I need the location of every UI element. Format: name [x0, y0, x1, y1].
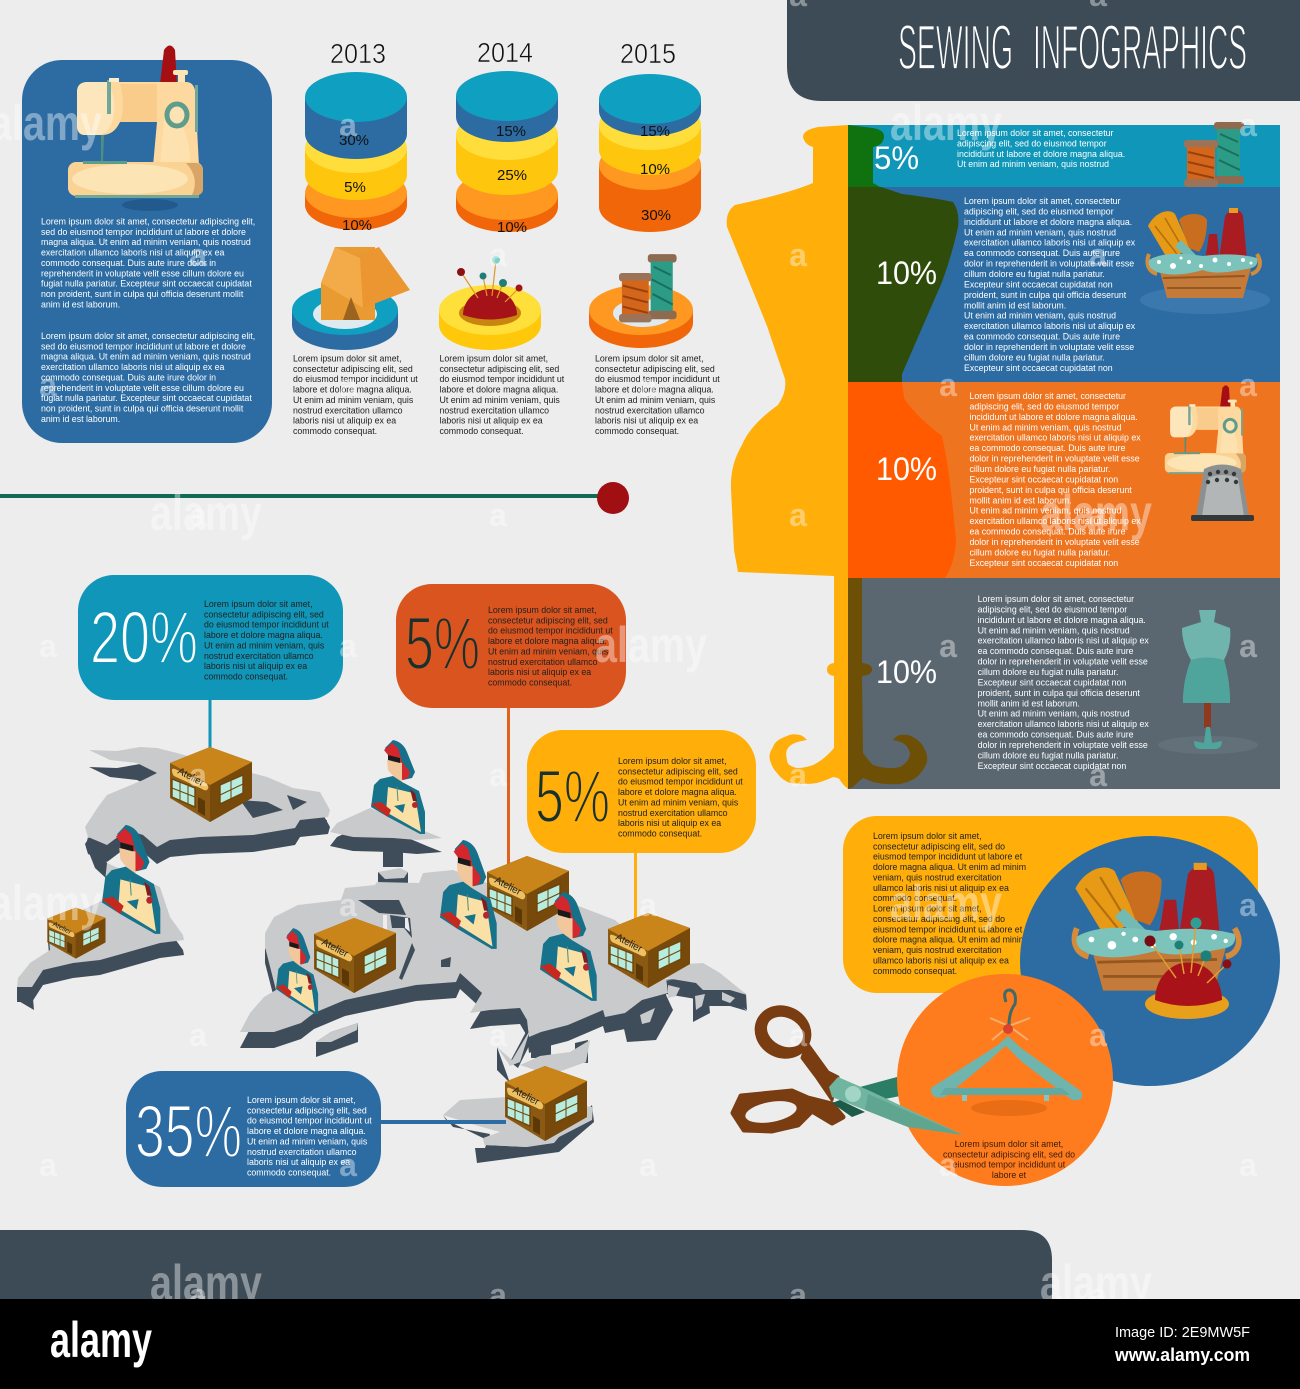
map inland gaps [383, 915, 410, 932]
panel: third 10%: ea commodo consequat. Duis aute irure [978, 646, 1134, 656]
watermark pattern: alamy [890, 875, 1002, 931]
seamstress 4 [540, 892, 597, 1001]
panel: 5%: incididunt ut labore et dolore magna aliqua. [957, 149, 1125, 159]
orange circle with hanger: eiusmod tempor incididunt ut [953, 1160, 1066, 1170]
paragraph one: reprehenderit in voluptate velit esse cillum dolore eu [41, 268, 244, 278]
text 2014: do eiusmod tempor incididunt ut [440, 374, 565, 384]
callout: 35%: consectetur adipiscing elit, sed [247, 1105, 367, 1115]
watermark pattern: a [189, 237, 207, 273]
text 2014: Ut enim ad minim veniam, quis [440, 395, 560, 405]
atelier building 3 [314, 918, 396, 993]
panel: amber notes: dolore magna aliqua. Ut enim ad minim [873, 862, 1026, 872]
paragraph one: commodo consequat. Duis aute irure dolor in [41, 258, 216, 268]
callout: 35%: nostrud exercitation ullamco [247, 1147, 357, 1157]
watermark pattern: a [339, 107, 357, 143]
map land layer [17, 747, 747, 1147]
panel: second 10%: Ut enim ad minim veniam, quis nostrud [970, 506, 1122, 516]
panel: first 10%: exercitation ullamco laboris nisi ut aliquip ex [964, 321, 1136, 331]
text 2013: commodo consequat. [293, 426, 377, 436]
text 2015: nostrud exercitation ullamco [595, 405, 705, 415]
callout: 5% amber [527, 730, 756, 853]
panel: amber notes: Lorem ipsum dolor sit amet, [873, 831, 982, 841]
panel: first 10% [848, 187, 1280, 382]
panel: first 10%: exercitation ullamco laboris nisi ut aliquip ex [964, 238, 1136, 248]
callout: 5% amber: do eiusmod tempor incididunt ut [618, 777, 743, 787]
callout: 5% orange [396, 584, 626, 708]
paragraph two: fugiat nulla pariatur. Excepteur sint occaecat cupidatat [41, 393, 252, 403]
watermark pattern: a [1089, 237, 1107, 273]
panel: first 10%: Ut enim ad minim veniam, quis nostrud [964, 227, 1116, 237]
panel: 5%: 5% [874, 140, 919, 176]
source footer: Image ID: 2E9MW5F [1115, 1324, 1250, 1341]
panel: second 10%: dolor in reprehenderit in voluptate velit esse [970, 537, 1140, 547]
callout: 5% amber: consectetur adipiscing elit, sed [618, 766, 738, 776]
watermark pattern: a [639, 1147, 657, 1183]
panel: second 10%: Lorem ipsum dolor sit amet, consectetur [970, 391, 1126, 401]
stacked cylinder 2015 [599, 74, 701, 232]
callout: 35%: laboris nisi ut aliquip ex ea [247, 1157, 350, 1167]
callout: 5% orange: laboris nisi ut aliquip ex ea [488, 667, 591, 677]
watermark pattern: a [639, 367, 657, 403]
atelier building 1: Atelier [176, 766, 206, 789]
watermark pattern: a [939, 1147, 957, 1183]
text 2013: do eiusmod tempor incididunt ut [293, 374, 418, 384]
paragraph two: magna aliqua. Ut enim ad minim veniam, quis nostrud [41, 352, 251, 362]
stacked cylinder 2014 [456, 71, 558, 236]
paragraph one: exercitation ullamco laboris nisi ut aliquip ex ea [41, 248, 224, 258]
panel: second 10%: Excepteur sint occaecat cupidatat non [970, 558, 1118, 568]
watermark pattern: a [1239, 887, 1257, 923]
panel: amber notes: eiusmod tempor incididunt ut labore et [873, 924, 1023, 934]
callout: 5% orange: Ut enim ad minim veniam, quis [488, 646, 609, 656]
text 2014: consectetur adipiscing elit, sed [440, 364, 559, 374]
seamstress 3 [440, 840, 497, 949]
panel: amber notes: eiusmod tempor incididunt ut labore et [873, 852, 1023, 862]
watermark pattern: a [939, 628, 957, 664]
ring with spools icon [589, 254, 693, 348]
watermark pattern: a [39, 1147, 57, 1183]
callout: 5% amber: 5% [535, 755, 610, 838]
text 2014: Lorem ipsum dolor sit amet, [440, 354, 548, 364]
atelier building 2 [47, 908, 106, 959]
callout: 35%: Lorem ipsum dolor sit amet, [247, 1095, 356, 1105]
panel: third 10%: adipiscing elit, sed do eiusmod tempor [978, 604, 1127, 614]
callout: 5% orange: nostrud exercitation ullamco [488, 657, 598, 667]
bottom bar [0, 1230, 1052, 1299]
map shadow layer [17, 764, 747, 1163]
callout: 5% orange: 5% [405, 602, 480, 685]
watermark pattern: a [489, 497, 507, 533]
panel: first 10%: ea commodo consequat. Duis aute irure [964, 248, 1120, 258]
stacked cylinder 2013 [305, 72, 407, 234]
panel: 5% [848, 122, 1280, 187]
panel: second 10%: exercitation ullamco laboris nisi ut aliquip ex [970, 433, 1141, 443]
callout: 5% amber: labore et dolore magna aliqua. [618, 787, 737, 797]
stacked cylinder 2013: 5% [344, 179, 366, 196]
panel: first 10%: incididunt ut labore et dolore magna aliqua. [964, 217, 1132, 227]
text 2015: Lorem ipsum dolor sit amet, [595, 354, 704, 364]
panel: second 10%: 10% [876, 451, 937, 487]
callout: 5% orange: do eiusmod tempor incididunt ut [488, 626, 613, 636]
world map [17, 747, 747, 1163]
callout: 35%: 35% [135, 1090, 242, 1173]
watermark pattern: a [39, 367, 57, 403]
paragraph one: sed do eiusmod tempor incididunt ut labore et dolore [41, 227, 246, 237]
seamstress 1 [371, 740, 425, 834]
watermark pattern: a [939, 367, 957, 403]
panel stack with dress form [727, 122, 1280, 789]
panel: first 10%: dolor in reprehenderit in voluptate velit esse [964, 342, 1134, 352]
text 2015: laboris nisi ut aliquip ex ea [595, 416, 698, 426]
atelier building 4 [487, 856, 569, 931]
panel: third 10%: 10% [876, 654, 937, 690]
panel: second 10% [848, 382, 1280, 578]
text 2013: labore et dolore magna aliqua. [293, 385, 412, 395]
paragraph two: reprehenderit in voluptate velit esse cillum dolore eu [41, 383, 244, 393]
callout: 5% amber: commodo consequat. [618, 829, 702, 839]
callout: 5% orange: labore et dolore magna aliqua. [488, 636, 607, 646]
callout: 35%: labore et dolore magna aliqua. [247, 1126, 366, 1136]
text 2013: laboris nisi ut aliquip ex ea [293, 416, 396, 426]
watermark pattern: alamy [1040, 1255, 1152, 1311]
title bar [787, 0, 1300, 101]
callout: 20%: 20% [90, 596, 198, 679]
watermark pattern: a [1239, 107, 1257, 143]
watermark pattern: a [789, 1277, 807, 1313]
watermark pattern: a [189, 1277, 207, 1313]
panel: 5%: adipiscing elit, sed do eiusmod tempor [957, 138, 1107, 148]
panel: amber notes: veniam, quis nostrud exercitation [873, 872, 1002, 882]
atelier building 6 [505, 1066, 587, 1141]
source footer: alamy [50, 1312, 152, 1368]
callout: 5% orange: Lorem ipsum dolor sit amet, [488, 605, 597, 615]
panel: third 10%: Ut enim ad minim veniam, quis nostrud [978, 709, 1130, 719]
blue circle with basket [1020, 836, 1280, 1086]
panel: first 10%: adipiscing elit, sed do eiusmod tempor [964, 206, 1114, 216]
panel: 5%: Lorem ipsum dolor sit amet, consectetur [957, 128, 1113, 138]
panel: first 10%: 10% [876, 255, 937, 291]
callout: 20%: do eiusmod tempor incididunt ut [204, 620, 329, 630]
callout: 5% orange: consectetur adipiscing elit, sed [488, 615, 608, 625]
panel: third 10%: ea commodo consequat. Duis aute irure [978, 730, 1134, 740]
panel: first 10%: Ut enim ad minim veniam, quis nostrud [964, 311, 1116, 321]
panel: third 10% [848, 578, 1280, 789]
text 2014: labore et dolore magna aliqua. [440, 385, 558, 395]
panel: third 10%: exercitation ullamco laboris nisi ut aliquip ex [978, 719, 1149, 729]
panel: third 10%: proident, sunt in culpa qui officia deserunt [978, 688, 1140, 698]
watermark pattern: a [189, 757, 207, 793]
text 2015: do eiusmod tempor incididunt ut [595, 374, 720, 384]
panel: amber notes: consectetur adipiscing elit, sed do [873, 841, 1005, 851]
callout: 35%: Ut enim ad minim veniam, quis [247, 1136, 368, 1146]
watermark pattern: a [339, 887, 357, 923]
panel: amber notes: veniam, quis nostrud exercitation [873, 945, 1002, 955]
watermark pattern: alamy [150, 1255, 262, 1311]
watermark pattern: a [1089, 757, 1107, 793]
callout: 5% amber: Lorem ipsum dolor sit amet, [618, 756, 727, 766]
atelier building 2: Atelier [51, 921, 73, 936]
year 2013 column: 2013 [330, 38, 386, 69]
stacked cylinder 2013: 30% [339, 132, 369, 149]
panel: first 10%: Excepteur sint occaecat cupidatat non [964, 363, 1113, 373]
watermark pattern: a [1089, 1277, 1107, 1313]
watermark pattern: a [1089, 497, 1107, 533]
panel: first 10%: Lorem ipsum dolor sit amet, consectetur [964, 196, 1120, 206]
paragraph two: non proident, sunt in culpa qui officia deserunt mollit [41, 404, 244, 414]
pin divider [0, 482, 629, 514]
text 2013: consectetur adipiscing elit, sed [293, 364, 413, 374]
panel: amber notes: ullamco laboris nisi ut aliquip ex ea [873, 955, 1009, 965]
panel: sewing machine description [22, 46, 272, 443]
callout: 20%: labore et dolore magna aliqua. [204, 630, 323, 640]
icon: pincushion [1144, 918, 1232, 1019]
source footer: www.alamy.com [1114, 1345, 1250, 1365]
scissor back blade [860, 1077, 900, 1100]
panel: second 10%: dolor in reprehenderit in voluptate velit esse [970, 454, 1140, 464]
paragraph two: sed do eiusmod tempor incididunt ut labore et dolore [41, 341, 246, 351]
panel: second 10%: cillum dolore eu fugiat nulla pariatur. [970, 464, 1110, 474]
panel: amber notes: commodo consequat. [873, 893, 957, 903]
panel: third 10%: Lorem ipsum dolor sit amet, consectetur [978, 594, 1134, 604]
stacked cylinder 2015: 30% [641, 207, 671, 224]
year 2014 column: 2014 [477, 37, 533, 68]
callout: 5% amber: nostrud exercitation ullamco [618, 808, 728, 818]
source footer [0, 1299, 1300, 1389]
panel: second 10%: mollit anim id est laborum. [970, 495, 1072, 505]
watermark pattern: a [489, 1017, 507, 1053]
text 2014: nostrud exercitation ullamco [440, 405, 549, 415]
watermark pattern: alamy [890, 95, 1002, 151]
ring with pincushion icon [439, 256, 541, 350]
paragraph one: magna aliqua. Ut enim ad minim veniam, quis nostrud [41, 237, 251, 247]
panel: second 10%: Ut enim ad minim veniam, quis nostrud [970, 422, 1122, 432]
callout: 35%: commodo consequat. [247, 1168, 331, 1178]
icon: spools [1184, 122, 1244, 187]
text 2015: consectetur adipiscing elit, sed [595, 364, 715, 374]
watermark pattern: a [1089, 1017, 1107, 1053]
callout: 5% amber: Ut enim ad minim veniam, quis [618, 797, 739, 807]
panel: second 10%: incididunt ut labore et dolore magna aliqua. [970, 412, 1138, 422]
atelier building 5 [608, 913, 690, 988]
dress form left half [727, 125, 848, 789]
panel: third 10%: exercitation ullamco laboris nisi ut aliquip ex [978, 636, 1149, 646]
text 2013: Lorem ipsum dolor sit amet, [293, 354, 402, 364]
callout: 20%: laboris nisi ut aliquip ex ea [204, 661, 307, 671]
watermark pattern: a [1239, 628, 1257, 664]
panel: amber notes: commodo consequat. [873, 966, 957, 976]
text 2015: Ut enim ad minim veniam, quis [595, 395, 716, 405]
paragraph one: non proident, sunt in culpa qui officia deserunt mollit [41, 289, 244, 299]
callout: 35% [126, 1071, 381, 1187]
stacked cylinder 2015: 10% [640, 161, 670, 178]
callout: 5% amber: laboris nisi ut aliquip ex ea [618, 818, 721, 828]
paragraph two: Lorem ipsum dolor sit amet, consectetur adipiscing elit, [41, 331, 255, 341]
panel: second 10%: exercitation ullamco laboris nisi ut aliquip ex [970, 516, 1141, 526]
panel: second 10%: ea commodo consequat. Duis aute irure [970, 527, 1126, 537]
title: SEWING [898, 13, 1013, 83]
watermark pattern: a [639, 887, 657, 923]
paragraph one: Lorem ipsum dolor sit amet, consectetur adipiscing elit, [41, 216, 255, 226]
paragraph one: fugiat nulla pariatur. Excepteur sint occaecat cupidatat [41, 279, 252, 289]
text 2014: laboris nisi ut aliquip ex ea [440, 416, 543, 426]
watermark pattern: a [789, 1017, 807, 1053]
panel: second 10%: adipiscing elit, sed do eiusmod tempor [970, 401, 1119, 411]
callout: 35%: do eiusmod tempor incididunt ut [247, 1116, 372, 1126]
panel: third 10%: dolor in reprehenderit in voluptate velit esse [978, 740, 1148, 750]
text 2013: nostrud exercitation ullamco [293, 405, 403, 415]
panel: third 10%: Excepteur sint occaecat cupidatat non [978, 761, 1126, 771]
stacked cylinder 2014: 25% [497, 167, 527, 184]
orange circle with hanger [897, 974, 1113, 1186]
panel: third 10%: mollit anim id est laborum. [978, 698, 1080, 708]
text 2015: labore et dolore magna aliqua. [595, 385, 714, 395]
watermark pattern: a [489, 237, 507, 273]
leader lines [208, 700, 637, 1124]
watermark pattern: a [1239, 1147, 1257, 1183]
callout: 20%: Ut enim ad minim veniam, quis [204, 640, 325, 650]
watermark pattern: a [489, 757, 507, 793]
atelier building 5: Atelier [614, 932, 644, 955]
panel: first 10%: mollit anim id est laborum. [964, 300, 1066, 310]
text 2013: Ut enim ad minim veniam, quis [293, 395, 414, 405]
panel: second 10%: Excepteur sint occaecat cupidatat non [970, 474, 1118, 484]
panel: amber notes: Lorem ipsum dolor sit amet, [873, 904, 982, 914]
panel: 5%: Ut enim ad minim veniam, quis nostrud [957, 159, 1109, 169]
callout: 5% orange: commodo consequat. [488, 678, 572, 688]
callout: 20% [78, 575, 343, 700]
watermark pattern: a [339, 367, 357, 403]
stacked cylinder 2015: 15% [640, 123, 670, 140]
atelier building 4: Atelier [493, 875, 523, 898]
icon: scissors [733, 995, 963, 1135]
watermark pattern: a [789, 237, 807, 273]
panel: third 10%: incididunt ut labore et dolore magna aliqua. [978, 615, 1146, 625]
icon: sewing machine and thimble [1165, 385, 1254, 521]
atelier building 3: Atelier [320, 937, 350, 960]
panel: second 10%: ea commodo consequat. Duis aute irure [970, 443, 1126, 453]
watermark pattern: alamy [1040, 485, 1152, 541]
year 2013 column [292, 38, 418, 436]
panel: first 10%: cillum dolore eu fugiat nulla pariatur. [964, 352, 1105, 362]
panel: first 10%: ea commodo consequat. Duis aute irure [964, 332, 1120, 342]
paragraph two: exercitation ullamco laboris nisi ut aliquip ex ea [41, 362, 224, 372]
callout: 20%: Lorem ipsum dolor sit amet, [204, 599, 313, 609]
year 2015 column: 2015 [620, 38, 676, 69]
icon: mannequin [1158, 610, 1258, 754]
seamstress 2 [102, 825, 160, 934]
atelier building 6: Atelier [511, 1085, 541, 1108]
stacked cylinder 2013: 10% [342, 217, 372, 234]
paragraph one: anim id est laborum. [41, 299, 120, 309]
text 2014: commodo consequat. [440, 426, 524, 436]
panel: amber notes: ullamco laboris nisi ut aliquip ex ea [873, 883, 1009, 893]
panel: second 10%: cillum dolore eu fugiat nulla pariatur. [970, 547, 1110, 557]
stacked cylinder 2014: 15% [496, 123, 526, 140]
text 2015: commodo consequat. [595, 426, 679, 436]
paragraph two: anim id est laborum. [41, 414, 120, 424]
watermark pattern: a [339, 1147, 357, 1183]
panel: amber notes: consectetur adipiscing elit, sed do [873, 914, 1005, 924]
panel: third 10%: Ut enim ad minim veniam, quis nostrud [978, 625, 1130, 635]
year 2015 column [589, 38, 720, 436]
panel: third 10%: dolor in reprehenderit in voluptate velit esse [978, 657, 1148, 667]
orange circle with hanger: consectetur adipiscing elit, sed do [943, 1149, 1075, 1159]
icon: hanger [931, 990, 1082, 1101]
panel: third 10%: Excepteur sint occaecat cupidatat non [978, 677, 1126, 687]
paragraph two: commodo consequat. Duis aute irure dolor in [41, 372, 216, 382]
panel: amber notes [843, 816, 1258, 993]
watermark pattern: a [189, 497, 207, 533]
panel: first 10%: dolor in reprehenderit in voluptate velit esse [964, 259, 1134, 269]
panel: second 10%: proident, sunt in culpa qui officia deserunt [970, 485, 1132, 495]
panel: first 10%: Excepteur sint occaecat cupidatat non [964, 279, 1113, 289]
callout: 20%: commodo consequat. [204, 672, 288, 682]
panel: third 10%: cillum dolore eu fugiat nulla pariatur. [978, 750, 1118, 760]
watermark pattern: a [789, 497, 807, 533]
watermark pattern: a [189, 1017, 207, 1053]
watermark pattern: a [789, 757, 807, 793]
watermark pattern: a [489, 1277, 507, 1313]
panel: third 10%: cillum dolore eu fugiat nulla pariatur. [978, 667, 1118, 677]
watermark pattern: alamy [595, 617, 707, 673]
map inland seas and coast shadows [240, 795, 451, 980]
seamstress 5 [276, 928, 318, 1014]
orange circle with hanger: labore et [992, 1170, 1027, 1180]
watermark pattern: a [39, 628, 57, 664]
watermark pattern: alamy [150, 485, 262, 541]
panel: first 10%: proident, sunt in culpa qui officia deserunt [964, 290, 1127, 300]
icon: sewing machine [68, 46, 203, 198]
panel: first 10%: cillum dolore eu fugiat nulla pariatur. [964, 269, 1105, 279]
icon: basket [1147, 208, 1260, 298]
stacked cylinder 2014: 10% [497, 219, 527, 236]
watermark pattern: a [1239, 367, 1257, 403]
callout: 20%: nostrud exercitation ullamco [204, 651, 314, 661]
panel: amber notes: dolore magna aliqua. Ut enim ad minim [873, 935, 1026, 945]
callout: 20%: consectetur adipiscing elit, sed [204, 609, 324, 619]
orange circle with hanger: Lorem ipsum dolor sit amet, [955, 1139, 1063, 1149]
watermark pattern: a [339, 628, 357, 664]
atelier building 1 [170, 747, 252, 822]
ring with pattern icon [292, 247, 410, 350]
year 2014 column [439, 37, 565, 436]
